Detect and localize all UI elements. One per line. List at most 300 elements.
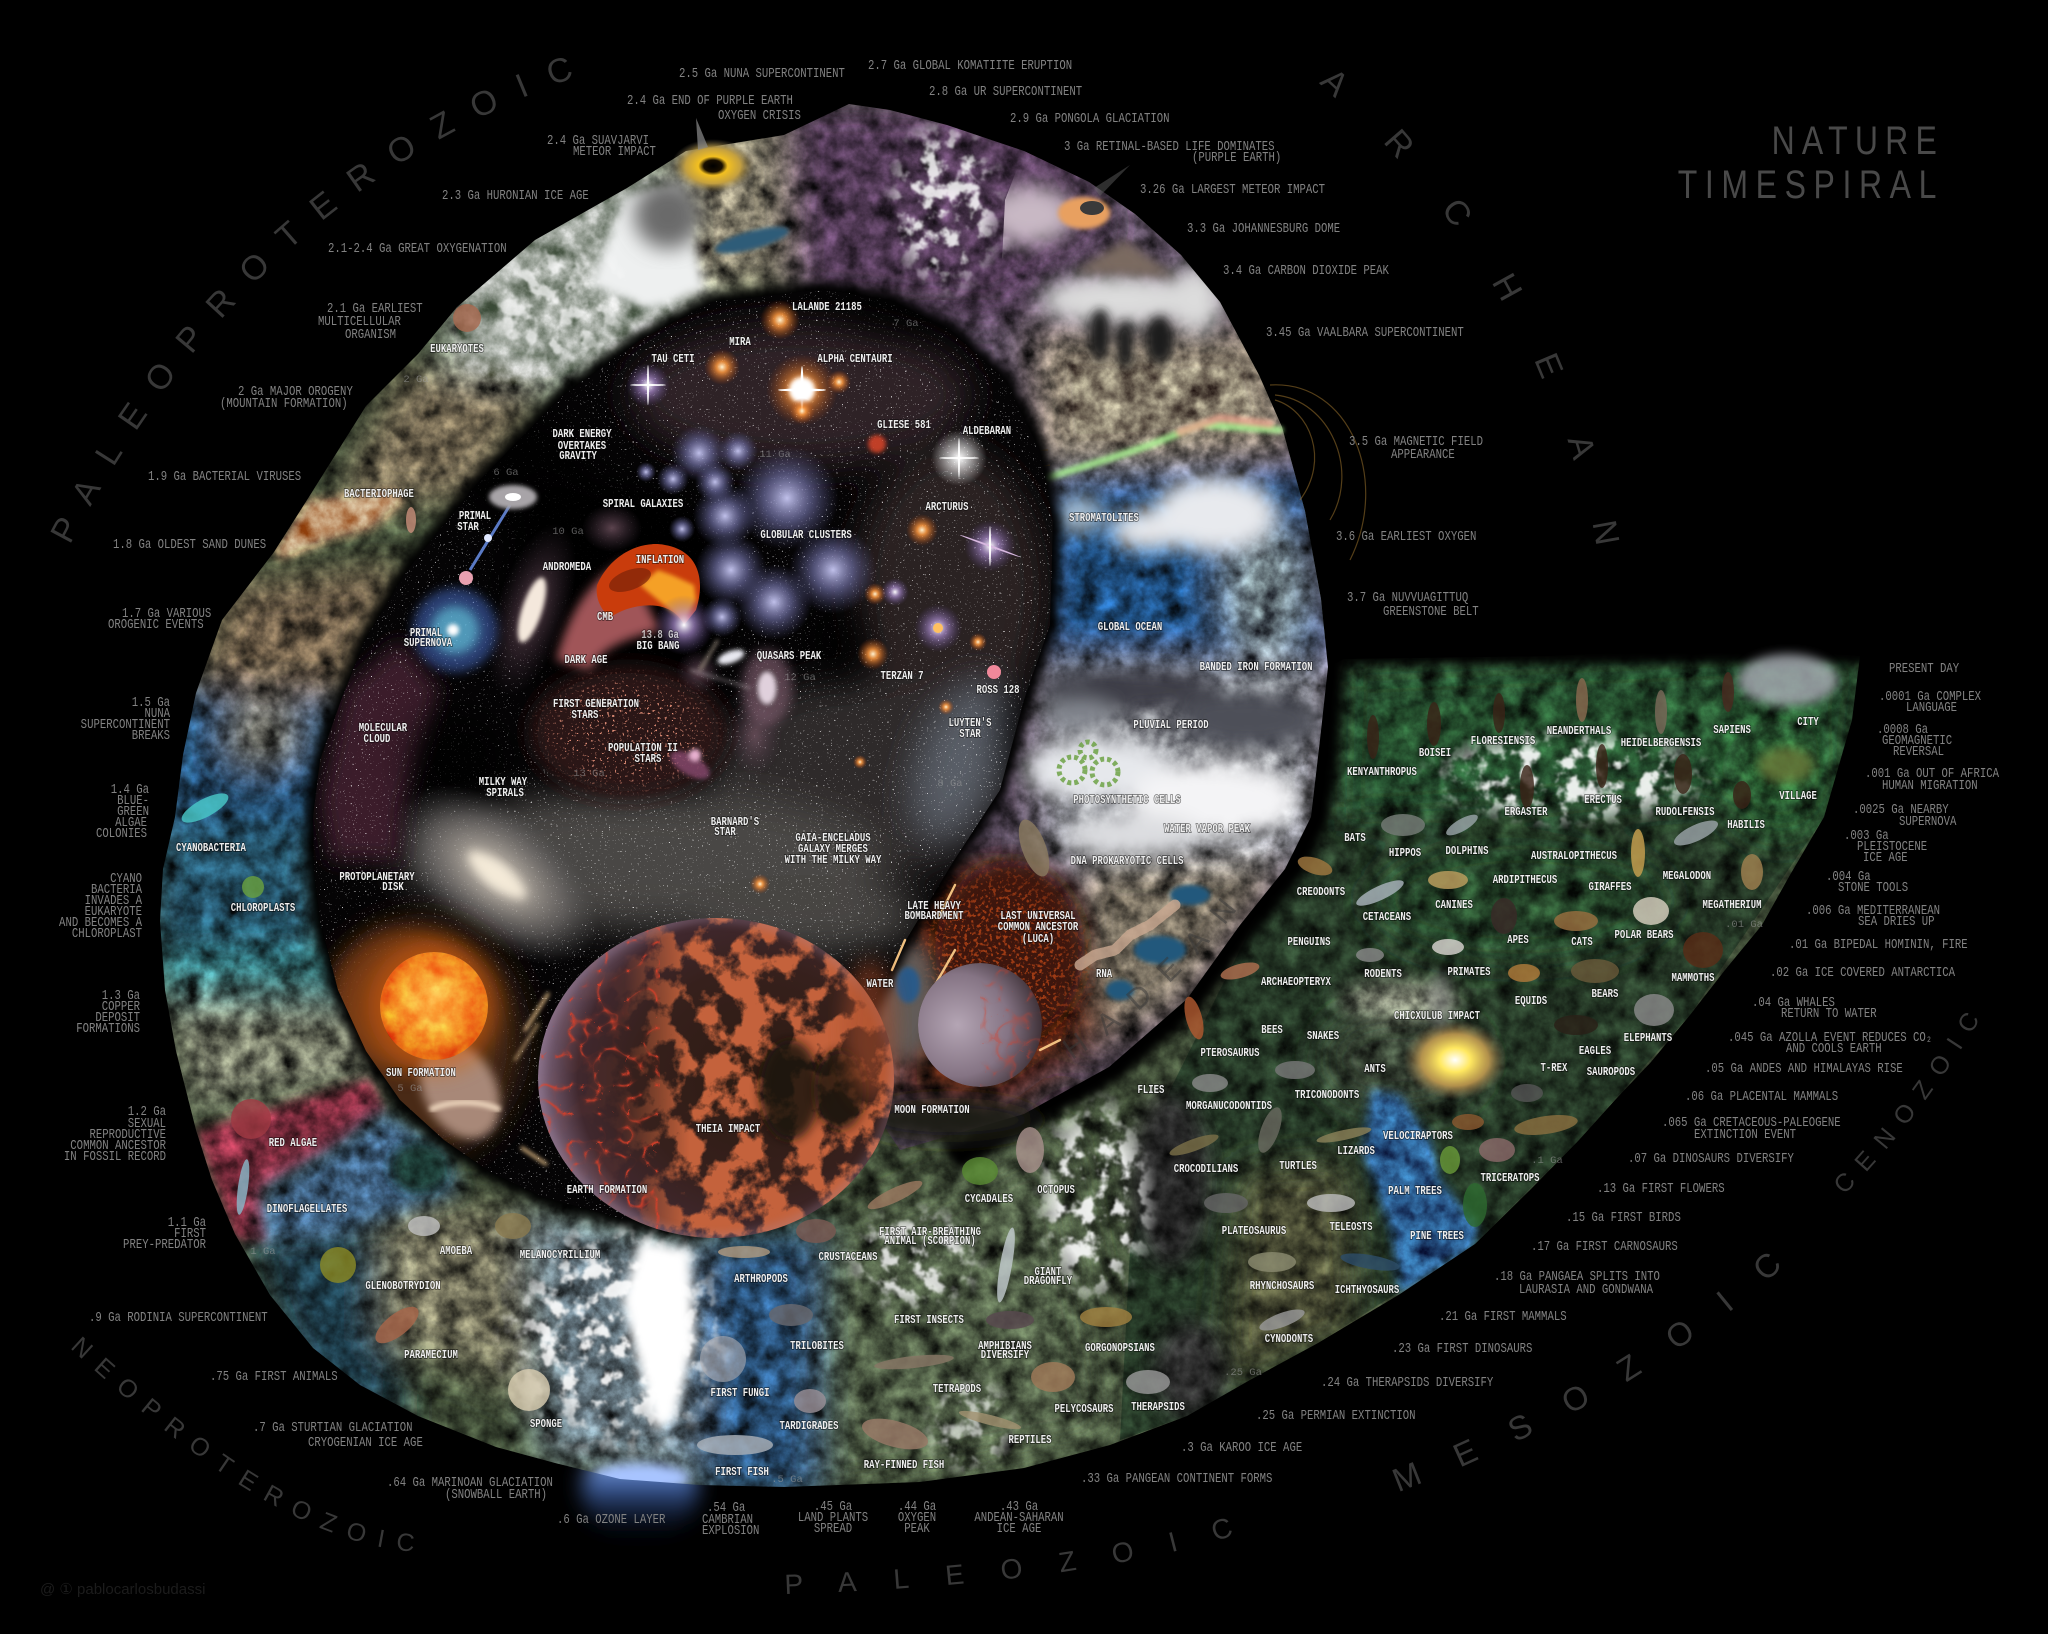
label: Trilobites: TRILOBITES: [790, 1340, 844, 1354]
label: Luyten's star: [948, 717, 992, 742]
event: 1.7 Ga: [108, 606, 211, 633]
event: cyanobacteria chloroplast: CHLOROPLAST: [72, 926, 142, 942]
label: Velociraptors: VELOCIRAPTORS: [1383, 1130, 1453, 1144]
label: Dinoflagellates: DINOFLAGELLATES: [267, 1203, 347, 1217]
event: .045 Ga: .045 Ga AZOLLA EVENT REDUCES CO₂: [1728, 1030, 1932, 1046]
volcano cone: [1075, 240, 1175, 277]
event: 3 Ga: [1064, 139, 1281, 166]
label: Lalande 21185: LALANDE 21185: [792, 301, 862, 315]
event: .003 Ga: .003 Ga: [1844, 828, 1889, 844]
marker: 7 Ga: 7 Ga: [893, 318, 919, 330]
snow fjords Neoproterozoic: [492, 1219, 734, 1460]
event: cyanobacteria chloroplast: CYANO: [110, 871, 142, 887]
event: .065 Ga: EXTINCTION EVENT: [1694, 1127, 1796, 1143]
event: .0025 Ga: .0025 Ga NEARBY: [1853, 802, 1949, 818]
icon: glenobotrydion: [320, 1247, 356, 1283]
marker: .1 Ga: .1 Ga: [1531, 1155, 1563, 1167]
event: .45 Ga: .45 Ga: [814, 1499, 853, 1515]
event: .0025 Ga: SUPERNOVA: [1899, 814, 1957, 830]
event: .001 Ga: [1865, 766, 1999, 794]
event: 2.7 Ga: 2.7 Ga GLOBAL KOMATIITE ERUPTION: [868, 58, 1072, 74]
event: 2.8 Ga: 2.8 Ga UR SUPERCONTINENT: [929, 84, 1082, 100]
event: .06 Ga: .06 Ga PLACENTAL MAMMALS: [1685, 1089, 1838, 1105]
marker: 11 Ga: 11 Ga: [759, 449, 791, 461]
label: Apes: APES: [1507, 934, 1529, 948]
Paleoproterozoic and Mesoproterozoic colour fields: [150, 100, 1120, 1500]
label: Pelycosaurs: PELYCOSAURS: [1054, 1403, 1114, 1417]
spiral outer band: [150, 90, 1880, 1500]
label: Polar bears: POLAR BEARS: [1614, 929, 1674, 943]
icon: amoeba: [408, 1216, 440, 1236]
icon: impact plume: [1428, 972, 1452, 1028]
event: .18 Ga: LAURASIA AND GONDWANA: [1519, 1282, 1653, 1298]
era: Mesozoic: MESOZOIC: [1392, 1254, 1779, 1492]
label: Reptiles: REPTILES: [1008, 1434, 1052, 1448]
top lake: [713, 221, 791, 259]
event: 1.5 Ga: SUPERCONTINENT: [81, 717, 170, 733]
icon: scorpion: [865, 1176, 925, 1214]
era: Cenozoic: CENOZOIC: [1836, 1013, 1978, 1192]
clouds top right: [985, 185, 1223, 334]
label: Gaia-Enceladus: [785, 832, 882, 868]
icon: milky way spiral: [362, 749, 632, 1001]
event: .0008 Ga: GEOMAGNETIC: [1882, 733, 1952, 749]
label: First air-breathing animal: FIRST AIR-BREATHING: [879, 1226, 981, 1240]
label: Sapiens: SAPIENS: [1713, 724, 1751, 738]
label: Teleosts: TELEOSTS: [1329, 1221, 1373, 1235]
icon: big bang: [654, 595, 714, 655]
label: LUCA: (LUCA): [1022, 933, 1054, 947]
marker: 12 Ga: 12 Ga: [784, 672, 816, 684]
black below the moon: [860, 1098, 1040, 1142]
outer timeline labels: Neoproterozoic and Paleozoic: [89, 1310, 1064, 1539]
label: Sun formation: SUN FORMATION: [386, 1067, 456, 1081]
era: Paleozoic: PALEOZOIC: [786, 1518, 1232, 1594]
icon: octopus: [1016, 1127, 1044, 1173]
lava field: [935, 860, 1085, 1040]
icon: canine: [1428, 871, 1468, 889]
event: 3.5 Ga: 3.5 Ga MAGNETIC FIELD: [1349, 434, 1483, 450]
event: .0025 Ga: [1853, 802, 1957, 830]
event: .9 Ga: .9 Ga RODINIA SUPERCONTINENT: [89, 1310, 268, 1326]
label: dark energy: [552, 428, 612, 464]
marker: 6 Ga: 6 Ga: [493, 467, 519, 479]
star fog: [400, 325, 1045, 955]
label: Bacteriophage: BACTERIOPHAGE: [344, 488, 414, 502]
icon: theropod: [1253, 1104, 1287, 1156]
icon: sauropod: [1513, 1112, 1579, 1138]
icon: crustacean: [796, 1219, 836, 1243]
marker: 1 Ga: 1 Ga: [250, 1246, 276, 1258]
protoplanetary disk: [320, 925, 520, 1155]
icon: teleost: [1307, 1194, 1355, 1212]
event: .44 Ga: PEAK: [904, 1521, 930, 1537]
event: .065 Ga: [1662, 1115, 1841, 1143]
label: Amoeba: AMOEBA: [440, 1245, 473, 1259]
label: Sponge: SPONGE: [530, 1418, 562, 1432]
storm cloud at huronian: [634, 181, 702, 249]
label: Morganucodontids: MORGANUCODONTIDS: [1186, 1100, 1272, 1114]
label: Paramecium: PARAMECIUM: [404, 1349, 458, 1363]
event: .13 Ga: .13 Ga FIRST FLOWERS: [1597, 1181, 1725, 1197]
icon: megatherium: [1741, 854, 1763, 890]
hominid figures: [1367, 672, 1751, 809]
marker: .25 Ga: .25 Ga: [1224, 1367, 1262, 1379]
event: cyanobacteria chloroplast: [59, 871, 142, 942]
label: Quasars peak: QUASARS PEAK: [757, 650, 822, 664]
event: 2 Ga: 2 Ga MAJOR OROGENY: [238, 384, 353, 400]
label: Tau Ceti: TAU CETI: [651, 353, 695, 367]
smoke next to earth: [871, 938, 939, 1062]
event: 3.45 Ga: 3.45 Ga VAALBARA SUPERCONTINENT: [1266, 325, 1464, 341]
label: Primal star: PRIMAL: [459, 510, 491, 524]
title: TIMESPIRAL: [1678, 162, 1944, 207]
icon: cat: [1554, 911, 1598, 931]
event: .64 Ga: .64 Ga MARINOAN GLACIATION: [387, 1475, 553, 1491]
label: Eukaryotes: EUKARYOTES: [430, 343, 484, 357]
label: First air-breathing animal: [879, 1226, 981, 1249]
event: 2.1 Ga: MULTICELLULAR: [318, 314, 401, 330]
label: Rhynchosaurs: RHYNCHOSAURS: [1250, 1280, 1314, 1294]
label: 13.8 Ga Big Bang: [636, 629, 680, 654]
label: T-Rex: T-REX: [1541, 1062, 1568, 1076]
event: 1.2 Ga: 1.2 Ga: [128, 1104, 166, 1120]
label: Habilis: HABILIS: [1727, 819, 1765, 833]
icon: plateosaurus: [1204, 1193, 1248, 1213]
pluvial storm clouds: [1025, 668, 1320, 857]
event: .43 Ga: [974, 1499, 1064, 1537]
event: 2.4 Ga Suavjarvi: METEOR IMPACT: [573, 144, 656, 160]
event: 1.1 Ga: [123, 1215, 206, 1253]
event: 1.5 Ga: 1.5 Ga: [132, 695, 170, 711]
label: Plateosaurus: PLATEOSAURUS: [1222, 1225, 1286, 1239]
label: Arcturus: ARCTURUS: [925, 501, 969, 515]
event: .04 Ga: [1752, 995, 1877, 1022]
label: Protoplanetary disk: PROTOPLANETARY: [339, 871, 415, 885]
event: .006 Ga: SEA DRIES UP: [1858, 914, 1935, 930]
label: Primal star: STAR: [457, 521, 479, 535]
event: .45 Ga: LAND PLANTS: [798, 1510, 868, 1526]
label: Pluvial period: PLUVIAL PERIOD: [1133, 719, 1209, 733]
event: .54 Ga: EXPLOSION: [702, 1523, 759, 1539]
event: .006 Ga: [1806, 903, 1940, 930]
icon: crocodilian: [1168, 1130, 1220, 1160]
event: .21 Ga: .21 Ga FIRST MAMMALS: [1439, 1309, 1567, 1325]
label: Cynodonts: CYNODONTS: [1265, 1333, 1313, 1347]
label: First fish: FIRST FISH: [715, 1466, 769, 1480]
event: cyanobacteria chloroplast: BACTERIA: [91, 882, 142, 898]
event: 2 Ga: (MOUNTAIN FORMATION): [220, 396, 348, 412]
icon: ape: [1491, 898, 1517, 934]
label: Stromatolites: STROMATOLITES: [1069, 512, 1139, 526]
outer timeline labels: Archean and Paleoproterozoic: [59, 58, 1169, 1253]
purple earth snow: [870, 120, 1020, 310]
event: .04 Ga: RETURN TO WATER: [1781, 1006, 1877, 1022]
label: Amphibians diversify: [978, 1340, 1032, 1363]
icon: aurora strip: [1046, 418, 1280, 478]
label: Sauropods: SAUROPODS: [1587, 1066, 1635, 1080]
event: 1.1 Ga: PREY-PREDATOR: [123, 1237, 206, 1253]
label: First fungi: FIRST FUNGI: [710, 1387, 770, 1401]
inner labels: Paleozoic band: [710, 1184, 1185, 1480]
event: .23 Ga: .23 Ga FIRST DINOSAURS: [1392, 1341, 1532, 1357]
label: Water: WATER: [867, 978, 894, 992]
label: Gaia-Enceladus: GALAXY MERGES: [798, 843, 868, 857]
event: .004 Ga: STONE TOOLS: [1838, 880, 1908, 896]
marker: 5 Ga: 5 Ga: [397, 1083, 423, 1095]
event: .43 Ga: ANDEAN-SAHARAN: [974, 1510, 1064, 1526]
label: Ants: ANTS: [1364, 1063, 1386, 1077]
icon: equid: [1508, 964, 1540, 982]
label: Rudolfensis: RUDOLFENSIS: [1655, 806, 1715, 820]
icon: spiral galaxy: [582, 504, 642, 552]
Ga markers on the spiral: [250, 318, 1763, 1486]
label: Lizards: LIZARDS: [1337, 1145, 1375, 1159]
event: 1.4 Ga: 1.4 Ga: [111, 782, 149, 798]
label: Glenobotrydion: GLENOBOTRYDION: [365, 1280, 441, 1294]
ridge shading: [470, 230, 640, 380]
icon: village: [1758, 747, 1814, 783]
event: .43 Ga: ICE AGE: [997, 1521, 1041, 1537]
event: 1.8 Ga: 1.8 Ga OLDEST SAND DUNES: [113, 537, 266, 553]
label: Protoplanetary disk: DISK: [382, 881, 404, 895]
event: 1.3 Ga: 1.3 Ga: [102, 988, 140, 1004]
label: Luyten's star: STAR: [959, 728, 981, 742]
label: Population II stars: POPULATION II: [608, 742, 678, 756]
icon: cyanobacteria: [178, 788, 232, 828]
event: 3.3 Ga: 3.3 Ga JOHANNESBURG DOME: [1187, 221, 1340, 237]
label: Snakes: SNAKES: [1307, 1030, 1339, 1044]
label: Neanderthals: NEANDERTHALS: [1547, 725, 1611, 739]
icon: magnetic field lines: [986, 385, 1366, 560]
inner labels: Mesozoic and Cenozoic band: [1138, 716, 1819, 1347]
event: .54 Ga: [702, 1500, 759, 1539]
event: 1.4 Ga: COLONIES: [96, 826, 147, 842]
label: Heidelbergensis: HEIDELBERGENSIS: [1621, 737, 1701, 751]
event: .045 Ga: AND COOLS EARTH: [1786, 1041, 1882, 1057]
label: LUCA: [998, 910, 1079, 947]
label: First insects: FIRST INSECTS: [894, 1314, 964, 1328]
event: .0001 Ga: [1879, 689, 1982, 716]
glacier snowball white: [622, 1240, 695, 1430]
label: Molecular cloud: CLOUD: [364, 733, 390, 747]
event: .7 Ga: CRYOGENIAN ICE AGE: [308, 1435, 423, 1451]
icon: moon: [918, 960, 1050, 1090]
event: 2.4 Ga Suavjarvi: 2.4 Ga SUAVJARVI: [547, 133, 649, 149]
event: .25 Ga: .25 Ga PERMIAN EXTINCTION: [1256, 1408, 1415, 1424]
title: NATURE: [1772, 118, 1944, 163]
credit watermark: @ ① pablocarlosbudassi: [40, 1581, 205, 1598]
label: Hippos: HIPPOS: [1389, 847, 1421, 861]
event: 1.3 Ga: COPPER: [102, 999, 140, 1015]
icon: pelycosaur: [1031, 1362, 1075, 1392]
label: Aldebaran: ALDEBARAN: [963, 425, 1011, 439]
event: .006 Ga: .006 Ga MEDITERRANEAN: [1806, 903, 1940, 919]
event: .18 Ga: [1494, 1269, 1660, 1298]
event: 3.26 Ga: 3.26 Ga LARGEST METEOR IMPACT: [1140, 182, 1325, 198]
label: LUCA: LAST UNIVERSAL: [1000, 910, 1076, 924]
event: .64 Ga: (SNOWBALL EARTH): [445, 1487, 547, 1503]
icon: meteor impact crater (Suavjarvi): [671, 139, 755, 193]
event: .001 Ga: .001 Ga OUT OF AFRICA: [1865, 766, 1999, 782]
event: 3.7 Ga: [1347, 590, 1479, 620]
label: City: CITY: [1797, 716, 1819, 730]
ocean clouds: [1056, 477, 1277, 553]
icon: primal supernova: [413, 571, 497, 672]
event: .001 Ga: HUMAN MIGRATION: [1882, 778, 1978, 794]
event: 3.4 Ga: 3.4 Ga CARBON DIOXIDE PEAK: [1223, 263, 1389, 279]
icon: arthropod: [718, 1246, 770, 1258]
icon: melanocyrillium: [495, 1213, 531, 1239]
marker: .01 Ga: .01 Ga: [1725, 919, 1763, 931]
label: Flies: FLIES: [1138, 1084, 1164, 1098]
event: 1.2 Ga: SEXUAL: [128, 1116, 166, 1132]
starfield: [300, 280, 1070, 1240]
Phanerozoic snow peaks: [1410, 725, 1730, 830]
event: cyanobacteria chloroplast: EUKARYOTE: [85, 904, 142, 920]
icon: bear: [1571, 959, 1619, 983]
icon: hippo: [1381, 814, 1425, 836]
label: Dolphins: DOLPHINS: [1445, 845, 1489, 859]
event: .6 Ga: .6 Ga OZONE LAYER: [557, 1512, 666, 1528]
label: Ardipithecus: ARDIPITHECUS: [1493, 874, 1557, 888]
label: Tardigrades: TARDIGRADES: [779, 1420, 839, 1434]
label: DNA prokaryotic cells: DNA PROKARYOTIC CELLS: [1071, 855, 1183, 869]
icon: cosmic microwave background: [556, 560, 660, 670]
icon: megalodon: [1671, 816, 1721, 850]
label: Primates: PRIMATES: [1447, 966, 1491, 980]
top fade of the Phanerozoic band: [1341, 646, 1860, 671]
label: 13.8 Ga Big Bang: 13.8 Ga: [641, 629, 679, 643]
event: .64 Ga: [387, 1475, 553, 1503]
label: Primal supernova: [404, 627, 453, 651]
label: Protoplanetary disk: [339, 871, 415, 895]
event: 1.1 Ga: FIRST: [174, 1226, 206, 1242]
label: Barnard's star: BARNARD'S: [711, 816, 759, 830]
label: Milky Way spirals: SPIRALS: [486, 787, 524, 801]
blue algae water: [262, 1110, 460, 1240]
icon: sponge: [508, 1369, 550, 1411]
marker: 2 Ga: 2 Ga: [403, 374, 429, 386]
event: 1.4 Ga: ALGAE: [115, 815, 147, 831]
event: .0001 Ga: LANGUAGE: [1906, 700, 1957, 716]
label: Earth formation: EARTH FORMATION: [567, 1184, 647, 1198]
icon: giraffe: [1631, 829, 1645, 877]
label: Tetrapods: TETRAPODS: [933, 1383, 981, 1397]
label: dark energy: OVERTAKES: [558, 440, 606, 454]
icon: first fish: [697, 1435, 773, 1455]
event: .7 Ga: [253, 1420, 423, 1451]
icon: dinoflagellate: [234, 1159, 252, 1215]
river delta: [1362, 1090, 1480, 1294]
event: .7 Ga: .7 Ga STURTIAN GLACIATION: [253, 1420, 412, 1436]
icon: ichthyosaur: [1339, 1250, 1401, 1274]
label: Creodonts: CREODONTS: [1297, 886, 1345, 900]
label: Giant dragonfly: [1024, 1266, 1073, 1289]
icon: tetrapod: [874, 1352, 954, 1372]
event: 2.1 Ga: [318, 301, 423, 343]
event: .02 Ga: .02 Ga ICE COVERED ANTARCTICA: [1770, 965, 1955, 981]
icon: archaeopteryx: [1219, 959, 1261, 983]
label: Milky Way spirals: MILKY WAY: [479, 776, 528, 790]
icon: earth (Theia impact): [530, 910, 910, 1250]
label: Late heavy bombardment: LATE HEAVY: [907, 900, 962, 914]
label: Archaeopteryx: ARCHAEOPTERYX: [1261, 976, 1332, 990]
event: 1.3 Ga: FORMATIONS: [76, 1021, 140, 1037]
cosmos shadow: [313, 289, 1053, 1230]
label: 13.8 Ga Big Bang: BIG BANG: [636, 640, 680, 654]
label: Ray-finned fish: RAY-FINNED FISH: [864, 1459, 944, 1473]
era: Paleoproterozoic: PALEOPROTEROZOIC: [50, 58, 572, 542]
label: RNA: RNA: [1096, 968, 1113, 982]
event: .0008 Ga: REVERSAL: [1893, 744, 1944, 760]
label: Kenyanthropus: KENYANTHROPUS: [1347, 766, 1417, 780]
icon: prokaryote: [1012, 816, 1056, 880]
event: .24 Ga: .24 Ga THERAPSIDS DIVERSIFY: [1321, 1375, 1494, 1391]
event: .045 Ga: [1728, 1030, 1932, 1057]
label: Global ocean: GLOBAL OCEAN: [1098, 621, 1162, 635]
icon: lizard: [1316, 1124, 1372, 1146]
label: Chloroplasts: CHLOROPLASTS: [231, 902, 295, 916]
icon: meteor trail: [696, 118, 708, 150]
event: .0008 Ga: [1877, 722, 1952, 760]
central darkness: [410, 284, 960, 810]
label: Amphibians diversify: DIVERSIFY: [981, 1349, 1030, 1363]
icon: sun: [368, 940, 500, 1072]
ozone light on the band edge: [590, 1463, 690, 1493]
inner labels: cosmos: [339, 301, 1020, 1198]
event: 1.2 Ga: REPRODUCTIVE: [89, 1127, 166, 1143]
icon: rodent: [1356, 948, 1384, 962]
event: 2.1 Ga: 2.1 Ga EARLIEST: [327, 301, 423, 317]
icon: trilobite: [769, 1304, 813, 1326]
smoke plumes Archean: [1089, 309, 1174, 369]
icon: RNA chain: [1080, 905, 1175, 965]
event: .33 Ga: .33 Ga PANGEAN CONTINENT FORMS: [1081, 1471, 1272, 1487]
label: Floresiensis: FLORESIENSIS: [1471, 735, 1535, 749]
event: 3.6 Ga: 3.6 Ga EARLIEST OXYGEN: [1336, 529, 1476, 545]
event: 2.3 Ga: 2.3 Ga HURONIAN ICE AGE: [442, 188, 589, 204]
label: Cetaceans: CETACEANS: [1363, 911, 1411, 925]
green Phanerozoic field: [1120, 656, 1860, 1440]
icon: tardigrade: [794, 1389, 826, 1413]
label: Megatherium: MEGATHERIUM: [1702, 899, 1762, 913]
event: .003 Ga: ICE AGE: [1863, 850, 1908, 866]
event: 2.9 Ga: 2.9 Ga PONGOLA GLACIATION: [1010, 111, 1169, 127]
icon: triceratops: [1479, 1138, 1515, 1162]
label: dark energy: DARK ENERGY: [552, 428, 612, 442]
event: .44 Ga: .44 Ga: [898, 1499, 937, 1515]
event: .43 Ga: .43 Ga: [1000, 1499, 1039, 1515]
event: 2 Ga: [220, 384, 353, 412]
icon: triconodont: [1275, 1061, 1315, 1079]
marker: 8 Ga: 8 Ga: [937, 778, 963, 790]
label: Giraffes: GIRAFFES: [1588, 881, 1632, 895]
label: Amphibians diversify: AMPHIBIANS: [978, 1340, 1032, 1354]
era: Neoproterozoic: NEOPROTEROZOIC: [71, 1336, 414, 1552]
terrain texture: [780, 140, 1340, 1160]
icon: rhynchosaur: [1248, 1252, 1296, 1272]
label: Turtles: TURTLES: [1279, 1160, 1317, 1174]
label: First generation stars: [553, 698, 639, 723]
event: .54 Ga: .54 Ga: [707, 1500, 746, 1516]
event: .003 Ga: PLEISTOCENE: [1857, 839, 1927, 855]
event: 1.1 Ga: 1.1 Ga: [168, 1215, 206, 1231]
panel: Archean and Hadean band: [780, 102, 1340, 1160]
icon: chicxulub impact: [1403, 1020, 1507, 1100]
label: Terzan 7: TERZAN 7: [880, 670, 924, 684]
event: .15 Ga: .15 Ga FIRST BIRDS: [1566, 1210, 1681, 1226]
